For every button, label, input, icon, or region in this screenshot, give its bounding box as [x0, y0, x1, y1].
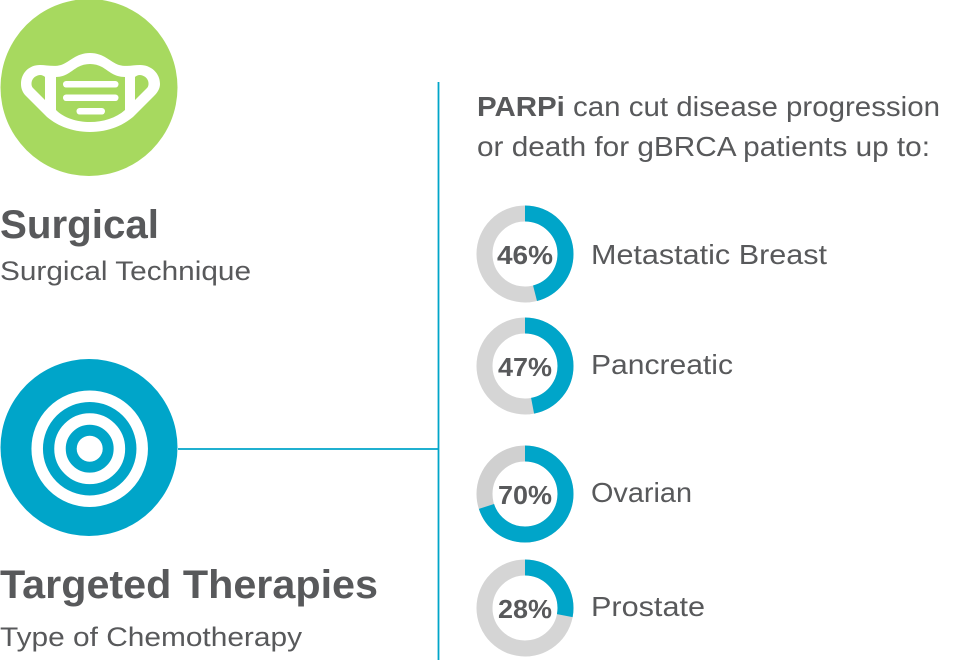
text: PARPi intro: or death for gBRCA patients up to:	[477, 131, 930, 162]
donut: 70% Ovarian	[484, 454, 692, 534]
icon: target	[0, 359, 178, 536]
heading: Targeted Therapies: Targeted Therapies	[0, 563, 378, 607]
text: Type of Chemotherapy: Type of Chemotherapy	[0, 622, 303, 652]
donut: 47% Pancreatic: Pancreatic	[591, 349, 733, 380]
text: Surgical Technique: Surgical Technique	[0, 256, 251, 286]
donut: 70% Ovarian: Ovarian	[591, 477, 692, 508]
donut: 28% Prostate: 28%	[498, 594, 552, 624]
donut: 70% Ovarian: 70%	[498, 480, 552, 510]
icon: surgical mask	[0, 0, 178, 176]
donut: 47% Pancreatic: 47%	[498, 352, 552, 382]
donut: 46% Metastatic Breast: Metastatic Breast	[591, 239, 827, 270]
donut: 47% Pancreatic	[484, 326, 733, 406]
donut: 28% Prostate	[484, 568, 705, 648]
donut: 28% Prostate: Prostate	[591, 591, 705, 622]
text: PARPi intro	[477, 91, 940, 162]
connector: vertical and horizontal lines	[178, 82, 438, 660]
heading: Surgical: Surgical	[0, 203, 159, 247]
text: PARPi intro: PARPi can cut disease progression	[477, 91, 940, 122]
donut: 46% Metastatic Breast	[484, 214, 827, 294]
donut: 46% Metastatic Breast: 46%	[497, 240, 553, 270]
